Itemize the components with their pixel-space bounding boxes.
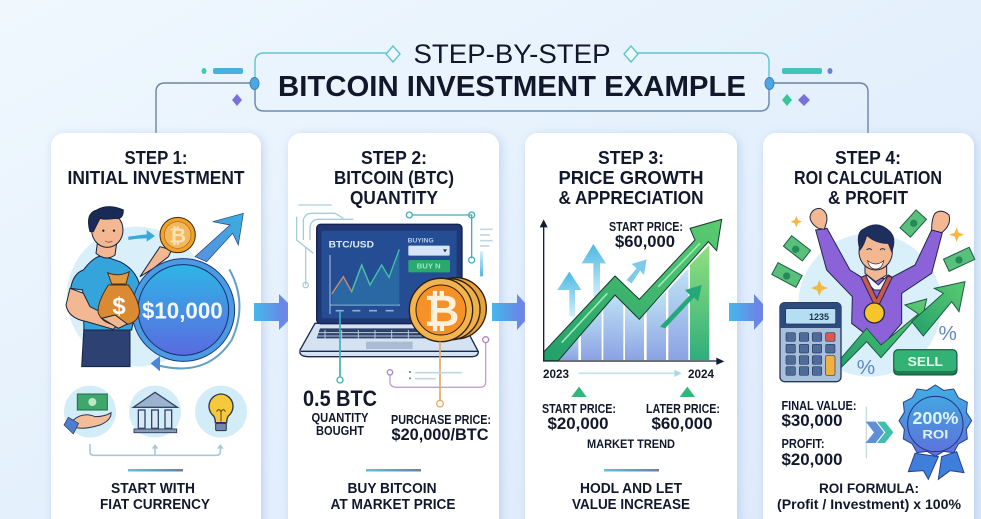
purchase price: PURCHASE PRICE: — [391, 412, 491, 427]
card 4 — [763, 133, 975, 519]
card 1 illustration: ₿ — [169, 225, 186, 248]
purchase price — [391, 412, 491, 444]
banknotes — [772, 210, 975, 287]
card 4 illustration: SELL — [908, 355, 943, 369]
card 2 caption — [330, 481, 456, 513]
axes — [544, 225, 720, 361]
top price label: START PRICE: — [609, 219, 683, 234]
card 4 illustration: 200% — [912, 408, 958, 428]
top price label: $60,000 — [615, 233, 675, 251]
final value and profit: PROFIT: — [782, 437, 824, 451]
card 3 caption: HODL AND LET — [580, 481, 682, 497]
big circle — [132, 259, 235, 361]
card 1 illustration — [64, 207, 247, 455]
card 1 caption: START WITH — [111, 481, 195, 497]
card 1 heading: INITIAL INVESTMENT — [68, 168, 244, 188]
card 2 illustration: BTC/USD — [329, 239, 375, 249]
card 1 illustration: $ — [112, 293, 126, 320]
arrow 2 — [492, 294, 533, 330]
final value and profit — [782, 398, 856, 469]
card 4 illustration — [772, 208, 975, 479]
card 2 heading — [334, 148, 454, 208]
card 1 divider — [128, 469, 183, 472]
rising light arrows — [557, 272, 581, 317]
money bag — [98, 272, 139, 325]
card 2 illustration: BUYING — [408, 239, 434, 245]
card 4 heading: STEP 4: — [835, 148, 901, 168]
start price: START PRICE: — [542, 401, 616, 416]
arrow 3 — [729, 294, 770, 330]
circuit lines — [297, 205, 353, 288]
main green arrow — [544, 219, 722, 361]
year labels — [543, 369, 715, 381]
card 3 heading: PRICE GROWTH — [558, 168, 704, 188]
card 2 illustration — [297, 205, 493, 407]
card 1 heading — [68, 148, 244, 188]
later price — [646, 401, 720, 433]
card 3 heading: & APPRECIATION — [558, 188, 704, 208]
card 2 illustration: ₿ — [424, 288, 459, 336]
title frame — [250, 46, 774, 111]
rosette badge — [899, 385, 972, 456]
top price label — [609, 219, 683, 251]
bars — [558, 330, 578, 360]
start price: $20,000 — [548, 415, 608, 433]
ROI formula: ROI FORMULA: — [819, 481, 919, 496]
card 3 divider — [604, 469, 659, 472]
card 1 caption: FIAT CURRENCY — [100, 497, 210, 513]
card 4 heading — [794, 148, 942, 208]
ROI formula — [777, 481, 962, 512]
year labels: 2023 — [543, 369, 569, 381]
leader lines — [337, 312, 342, 377]
card 2 heading: STEP 2: — [361, 148, 427, 168]
green trend arrow — [841, 299, 927, 368]
coin stack — [425, 278, 486, 339]
price chart — [540, 219, 724, 397]
title: step-by-step: STEP-BY-STEP — [414, 39, 610, 69]
0.5 BTC value: BOUGHT — [316, 424, 364, 438]
coin — [160, 217, 195, 253]
card 1 illustration: $10,000 — [142, 297, 223, 323]
card 1 — [51, 133, 261, 519]
final value and profit: $30,000 — [782, 412, 842, 430]
bank icon — [129, 386, 181, 438]
title: bitcoin investment example: BITCOIN INVESTMENT EXAMPLE — [278, 71, 746, 103]
circular arrow — [157, 269, 239, 368]
person — [810, 208, 950, 347]
0.5 BTC value — [303, 386, 377, 438]
card 4 illustration: 1235 — [809, 312, 829, 322]
later price: LATER PRICE: — [646, 401, 720, 416]
year labels: 2024 — [688, 369, 715, 381]
arrow 1 — [254, 294, 297, 330]
card 2 caption: AT MARKET PRICE — [330, 497, 456, 513]
calculator — [780, 303, 841, 382]
card 1 heading: STEP 1: — [124, 148, 188, 168]
card 2 — [288, 133, 499, 519]
market trend: MARKET TREND — [587, 437, 675, 451]
connector lines to cards — [156, 83, 868, 133]
growth arrow — [195, 213, 243, 262]
sell button — [894, 350, 957, 375]
person — [66, 207, 172, 367]
arrow to coin — [128, 230, 155, 242]
card 2 heading: QUANTITY — [350, 188, 438, 208]
card 4 heading: & PROFIT — [828, 188, 908, 208]
later price: $60,000 — [652, 415, 712, 433]
hand icon — [64, 386, 116, 438]
percent signs: % — [857, 356, 875, 379]
card 1 caption — [100, 481, 210, 513]
start price — [542, 401, 616, 433]
card 2 heading: BITCOIN (BTC) — [334, 168, 454, 188]
card 4 illustration: ROI — [922, 428, 948, 442]
laptop — [300, 323, 478, 357]
card 3 heading: STEP 3: — [598, 148, 664, 168]
timeline arrow — [578, 371, 675, 376]
final value and profit: $20,000 — [782, 451, 842, 469]
card 4 heading: ROI CALCULATION — [794, 168, 942, 188]
card 2 divider — [366, 469, 421, 472]
card 3 caption — [572, 481, 690, 513]
ribbon tails — [908, 452, 964, 479]
0.5 BTC value: 0.5 BTC — [303, 386, 377, 411]
title decorations — [202, 68, 832, 106]
purchase price: $20,000/BTC — [392, 426, 489, 444]
card 4 illustration: % — [938, 322, 957, 345]
price markers — [571, 387, 695, 397]
ROI formula: (Profit / Investment) x 100% — [777, 496, 962, 512]
bulb icon — [195, 386, 247, 438]
connecting bracket — [90, 444, 220, 455]
card 2 caption: BUY BITCOIN — [348, 481, 436, 497]
card 3 — [525, 133, 737, 519]
0.5 BTC value: QUANTITY — [312, 411, 369, 425]
card 3 heading — [558, 148, 704, 208]
sparkles — [791, 216, 964, 296]
chevrons — [864, 407, 868, 458]
final value and profit: FINAL VALUE: — [782, 398, 856, 413]
card 3 caption: VALUE INCREASE — [572, 497, 690, 513]
card 2 illustration: BUY N — [417, 262, 441, 271]
